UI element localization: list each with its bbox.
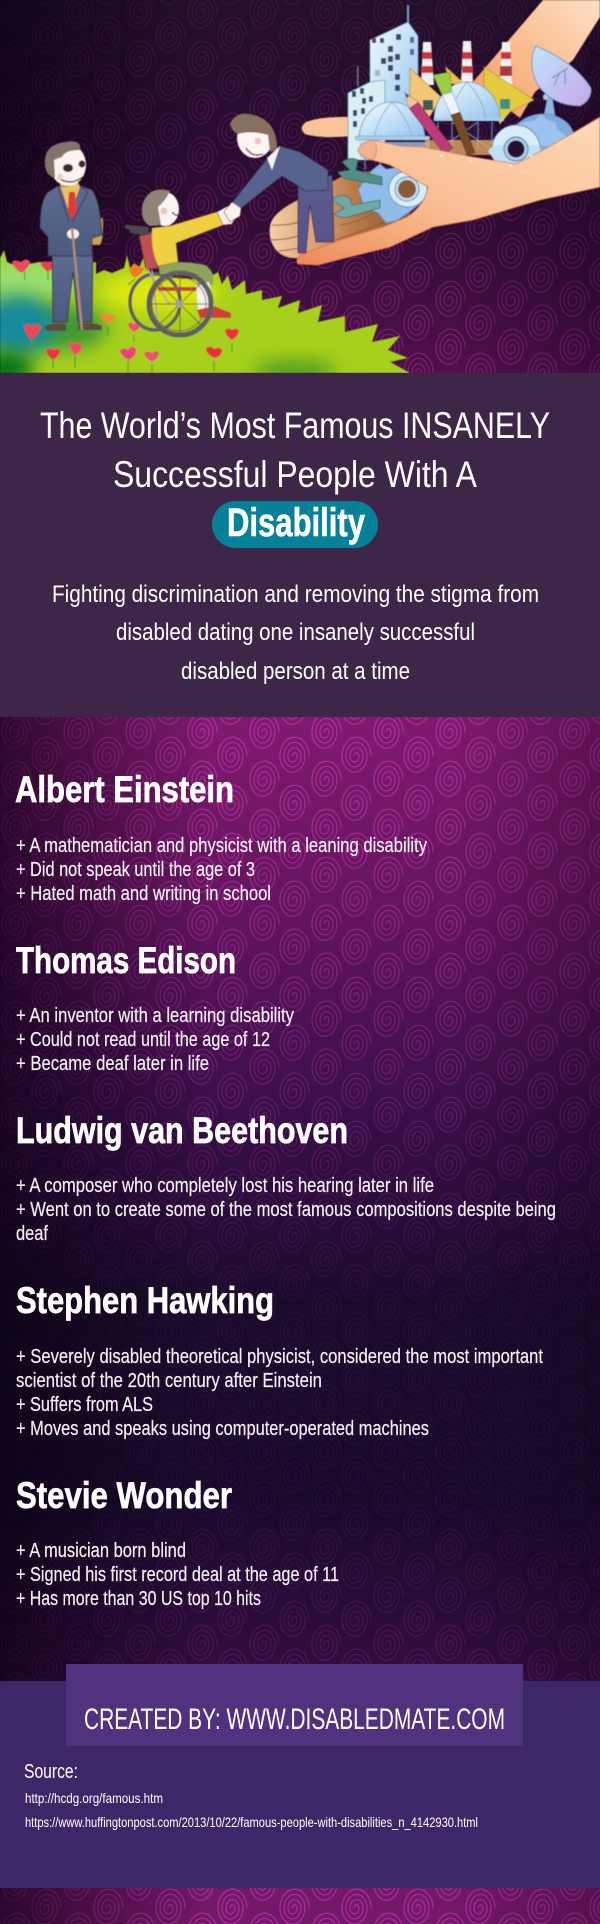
satellite dish: [532, 46, 591, 122]
torso and arm: [152, 206, 238, 266]
facts: scientist of the 20th century after Einstein: [16, 1370, 322, 1392]
facts: [16, 1346, 543, 1440]
facts: [16, 1540, 339, 1610]
subtitle: Fighting discrimination and removing the stigma from: [52, 581, 539, 608]
man reaching to shake hand: [224, 114, 334, 253]
section: Stevie Wonder: [16, 1475, 339, 1610]
credit banner: [66, 1664, 523, 1746]
panel: title: [0, 373, 600, 717]
panel: footer: [0, 1664, 600, 1888]
facts: + Did not speak until the age of 3: [16, 859, 255, 881]
head: [142, 190, 179, 226]
wrenches: [332, 158, 382, 218]
wheelchair: [127, 227, 205, 330]
sources: [24, 1761, 478, 1830]
sources: http://hcdg.org/famous.htm: [25, 1790, 163, 1806]
back hand and forearm: [270, 0, 600, 258]
name: Thomas Edison: [16, 940, 236, 981]
subtitle: disabled dating one insanely successful: [116, 619, 475, 646]
highlighted word: Disability: Disability: [227, 501, 366, 545]
facts: + Signed his first record deal at the age of 11: [16, 1564, 339, 1586]
name: Stevie Wonder: [16, 1475, 232, 1516]
rulers: [410, 66, 534, 125]
sources: https://www.huffingtonpost.com/2013/10/22/famous-people-with-disabilities_n_4142930.html: [25, 1814, 478, 1830]
subtitle: disabled person at a time: [181, 658, 410, 685]
facts: + A mathematician and physicist with a leaning disability: [16, 835, 427, 857]
name: Albert Einstein: [15, 769, 234, 810]
section: Albert Einstein: [15, 769, 427, 905]
name: Stephen Hawking: [16, 1280, 274, 1321]
subtitle: [52, 581, 539, 685]
section: Ludwig van Beethoven: [16, 1110, 556, 1245]
tall building: [370, 5, 418, 125]
section: Stephen Hawking: [16, 1280, 543, 1440]
facts: + Became deaf later in life: [16, 1053, 209, 1075]
wheel: [149, 273, 211, 335]
facts: + A composer who completely lost his hearing later in life: [16, 1175, 434, 1197]
city, factory and tools held in hands: [332, 5, 591, 223]
facts: + Suffers from ALS: [16, 1394, 153, 1416]
grass hill: [0, 250, 410, 373]
facts: + Moves and speaks using computer-operated machines: [16, 1418, 429, 1440]
lower gear: [358, 164, 428, 223]
facts: + Has more than 30 US top 10 hits: [16, 1588, 261, 1610]
pencil: [405, 93, 453, 154]
chimneys: [421, 41, 512, 86]
facts: + Hated math and writing in school: [16, 883, 271, 905]
hero illustration: [0, 0, 600, 384]
facts: + Could not read until the age of 12: [16, 1029, 270, 1051]
heading: Successful People With A: [113, 454, 477, 495]
name: Ludwig van Beethoven: [16, 1110, 348, 1151]
flowers: [12, 260, 239, 372]
facts: deaf: [16, 1223, 48, 1245]
woman in wheelchair: [127, 190, 238, 335]
facts: + A musician born blind: [16, 1540, 186, 1562]
paint brush: [433, 72, 475, 155]
trousers and shoes: [158, 262, 231, 318]
facts: [16, 1175, 556, 1245]
low building: [348, 66, 385, 160]
gears: [488, 114, 574, 173]
sources: Source:: [24, 1761, 78, 1783]
section: Thomas Edison: [16, 940, 294, 1075]
facts: [16, 835, 427, 905]
domes: [355, 82, 504, 170]
front hand holding the objects: [297, 117, 600, 265]
facts: [16, 1005, 294, 1075]
blind man with cane: [40, 141, 103, 331]
facts: + An inventor with a learning disability: [16, 1005, 294, 1027]
heading: [40, 405, 550, 495]
